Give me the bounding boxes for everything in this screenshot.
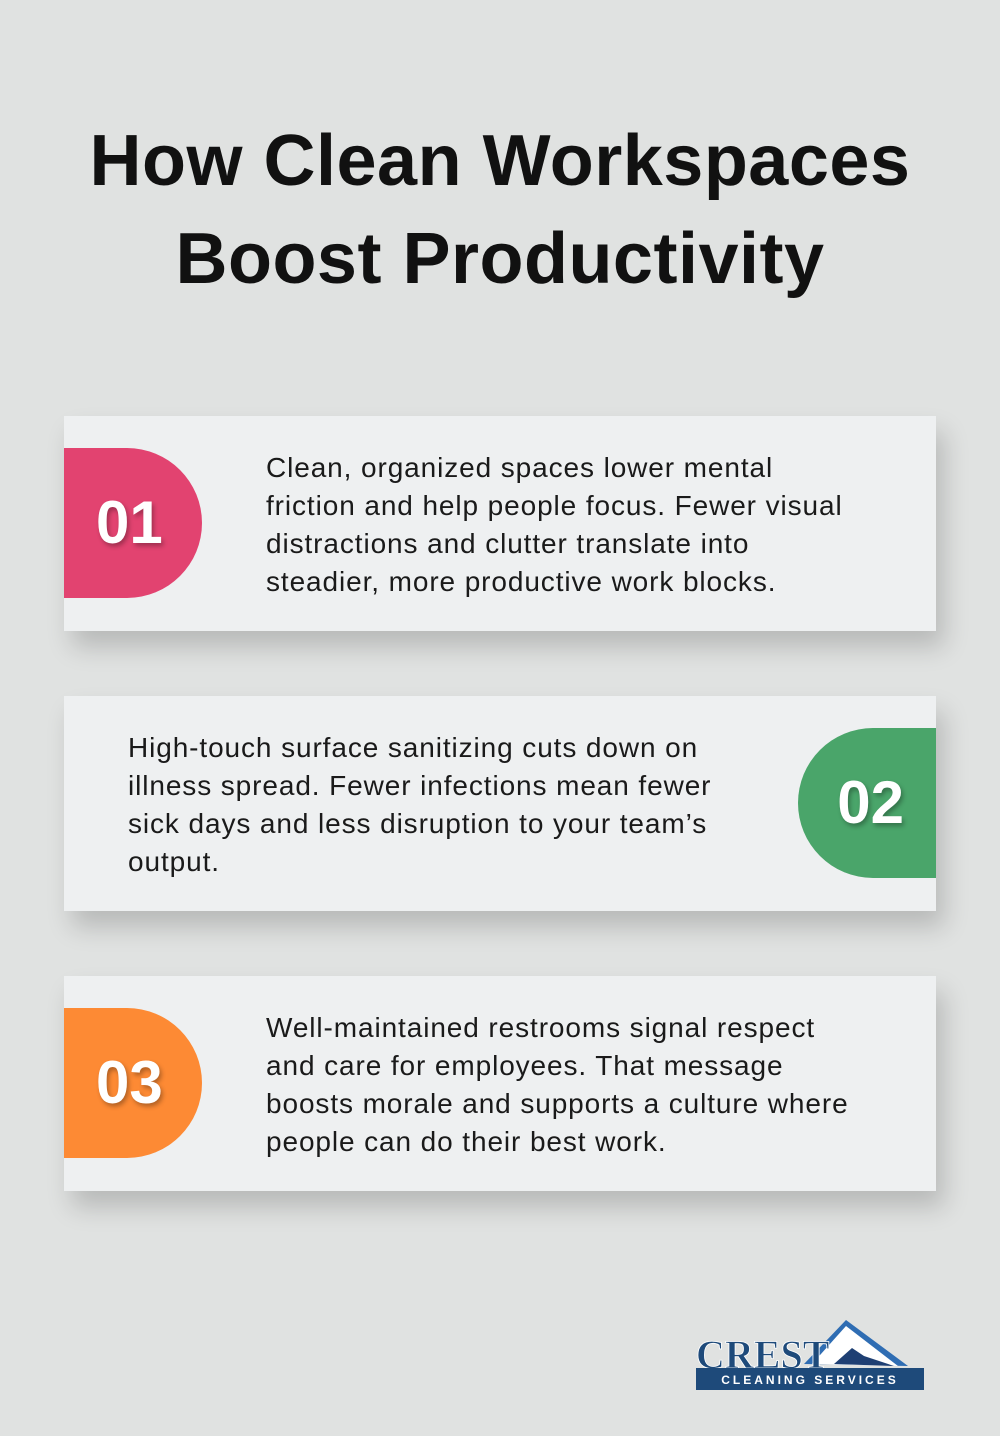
title: Boost Productivity [175,219,825,299]
badge 03 [64,1008,202,1158]
panel: card 3 [64,976,936,1191]
text 3: and care for employees. That message [266,1050,783,1081]
badge 01 [64,448,202,598]
logo: CLEANING SERVICES [721,1373,899,1387]
title [90,121,910,299]
logo: CREST [696,1332,830,1377]
text 2 [128,732,711,877]
panel: card 1 [64,416,936,631]
text 3: people can do their best work. [266,1126,667,1157]
text 1: distractions and clutter translate into [266,528,749,559]
badge 02: 02 [837,769,904,836]
text 3 [266,1012,849,1157]
title: How Clean Workspaces [90,121,910,201]
text 1: Clean, organized spaces lower mental [266,452,773,483]
panel: card 2 [64,696,936,911]
text 1 [266,452,843,597]
badge 03: 03 [96,1049,163,1116]
logo [696,1320,924,1390]
text 2: illness spread. Fewer infections mean fewer [128,770,711,801]
text 1: friction and help people focus. Fewer visual [266,490,843,521]
text 2: sick days and less disruption to your team’s [128,808,707,839]
badge 02 [798,728,936,878]
text 2: High-touch surface sanitizing cuts down on [128,732,698,763]
text 2: output. [128,846,220,877]
text 1: steadier, more productive work blocks. [266,566,776,597]
text 3: Well-maintained restrooms signal respect [266,1012,815,1043]
badge 01: 01 [96,489,163,556]
text 3: boosts morale and supports a culture where [266,1088,849,1119]
